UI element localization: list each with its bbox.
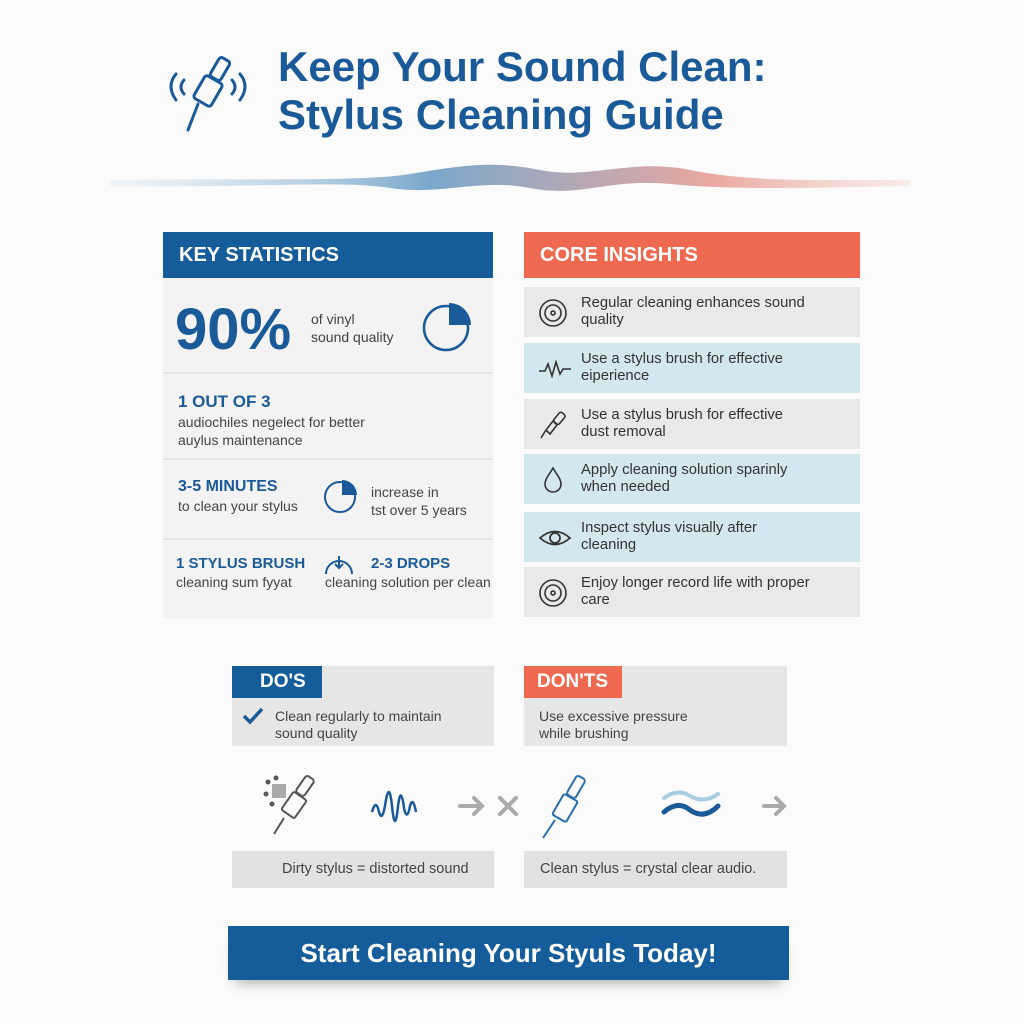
- title: Stylus Cleaning Guide: [278, 91, 724, 138]
- insight 1: Regular cleaning enhances sound quality: [581, 295, 805, 328]
- stat: 1 out of 3: [163, 372, 493, 458]
- icon: distorted wave: [370, 790, 418, 822]
- stat: 90%: [175, 297, 471, 362]
- insight 3: Use a stylus brush for effective dust removal: [581, 407, 783, 440]
- insight 2: [524, 343, 860, 393]
- heading: do's: DO'S: [260, 671, 306, 692]
- insight 3: [524, 399, 860, 449]
- insight 4: Apply cleaning solution sparinly when needed: [581, 462, 787, 495]
- panel: don'ts: [524, 666, 787, 746]
- decorative wave band: [110, 164, 910, 191]
- heading: core insights: CORE INSIGHTS: [540, 244, 698, 266]
- arrow and cross: [458, 796, 518, 816]
- stat: 3-5 minutes: tst over 5 years: [371, 502, 467, 518]
- panel: key statistics: [163, 232, 493, 618]
- panel: don'ts: Use excessive pressure: [539, 708, 688, 724]
- heading: key statistics: [163, 232, 493, 278]
- stat: brush and drops: 1 STYLUS BRUSH: [176, 555, 305, 572]
- title: Keep Your Sound Clean:: [278, 43, 766, 90]
- insight 4: [524, 454, 860, 504]
- caption: clean: Clean stylus = crystal clear audio.: [540, 861, 756, 877]
- icon: dirty stylus: [264, 775, 315, 834]
- heading: key statistics: KEY STATISTICS: [179, 244, 339, 266]
- stat: brush and drops: cleaning solution per clean: [325, 574, 491, 590]
- panel: do's: [232, 666, 494, 746]
- stat: brush and drops: 2-3 DROPS: [371, 555, 450, 572]
- arrow: [762, 796, 787, 816]
- icon: clear wave: [662, 790, 720, 817]
- title icon: [169, 56, 246, 132]
- stat: 1 out of 3: 1 OUT OF 3: [178, 392, 271, 411]
- stat: 1 out of 3: audiochiles negelect for better: [178, 414, 365, 430]
- panel: do's: sound quality: [275, 725, 358, 741]
- stat: 3-5 minutes: [163, 458, 493, 538]
- caption: dirty: Dirty stylus = distorted sound: [282, 861, 469, 877]
- stat: 90%: 90%: [175, 297, 291, 362]
- insight 1: [524, 287, 860, 337]
- stat: 1 out of 3: auylus maintenance: [178, 432, 303, 448]
- stat: 3-5 minutes: 3-5 MINUTES: [178, 478, 278, 495]
- insight 6: Enjoy longer record life with proper care: [581, 575, 810, 608]
- call to action button: Start Cleaning Your Styuls Today!: [300, 938, 717, 968]
- caption: clean: [524, 851, 787, 888]
- insight 6: [524, 567, 860, 617]
- heading: don'ts: [524, 666, 622, 698]
- panel: do's: Clean regularly to maintain: [275, 708, 442, 724]
- stat: brush and drops: cleaning sum fyyat: [176, 574, 292, 590]
- stat: 90%: sound quality: [311, 329, 394, 345]
- call to action button: [228, 926, 789, 980]
- stat: brush and drops: [163, 538, 493, 618]
- insight 5: Inspect stylus visually after cleaning: [581, 520, 757, 553]
- icon: clean stylus: [542, 775, 586, 838]
- insight 2: Use a stylus brush for effective eiperience: [581, 351, 783, 384]
- stat: 3-5 minutes: increase in: [371, 484, 439, 500]
- stat: 90%: of vinyl: [311, 311, 355, 327]
- heading: core insights: [524, 232, 860, 278]
- heading: don'ts: DON'TS: [537, 671, 608, 692]
- stat: 3-5 minutes: to clean your stylus: [178, 498, 298, 514]
- insight 5: [524, 512, 860, 562]
- panel: don'ts: while brushing: [539, 725, 628, 741]
- title: [278, 43, 766, 138]
- heading: do's: [232, 666, 322, 698]
- caption: dirty: [232, 851, 494, 888]
- icon: check: [242, 708, 264, 724]
